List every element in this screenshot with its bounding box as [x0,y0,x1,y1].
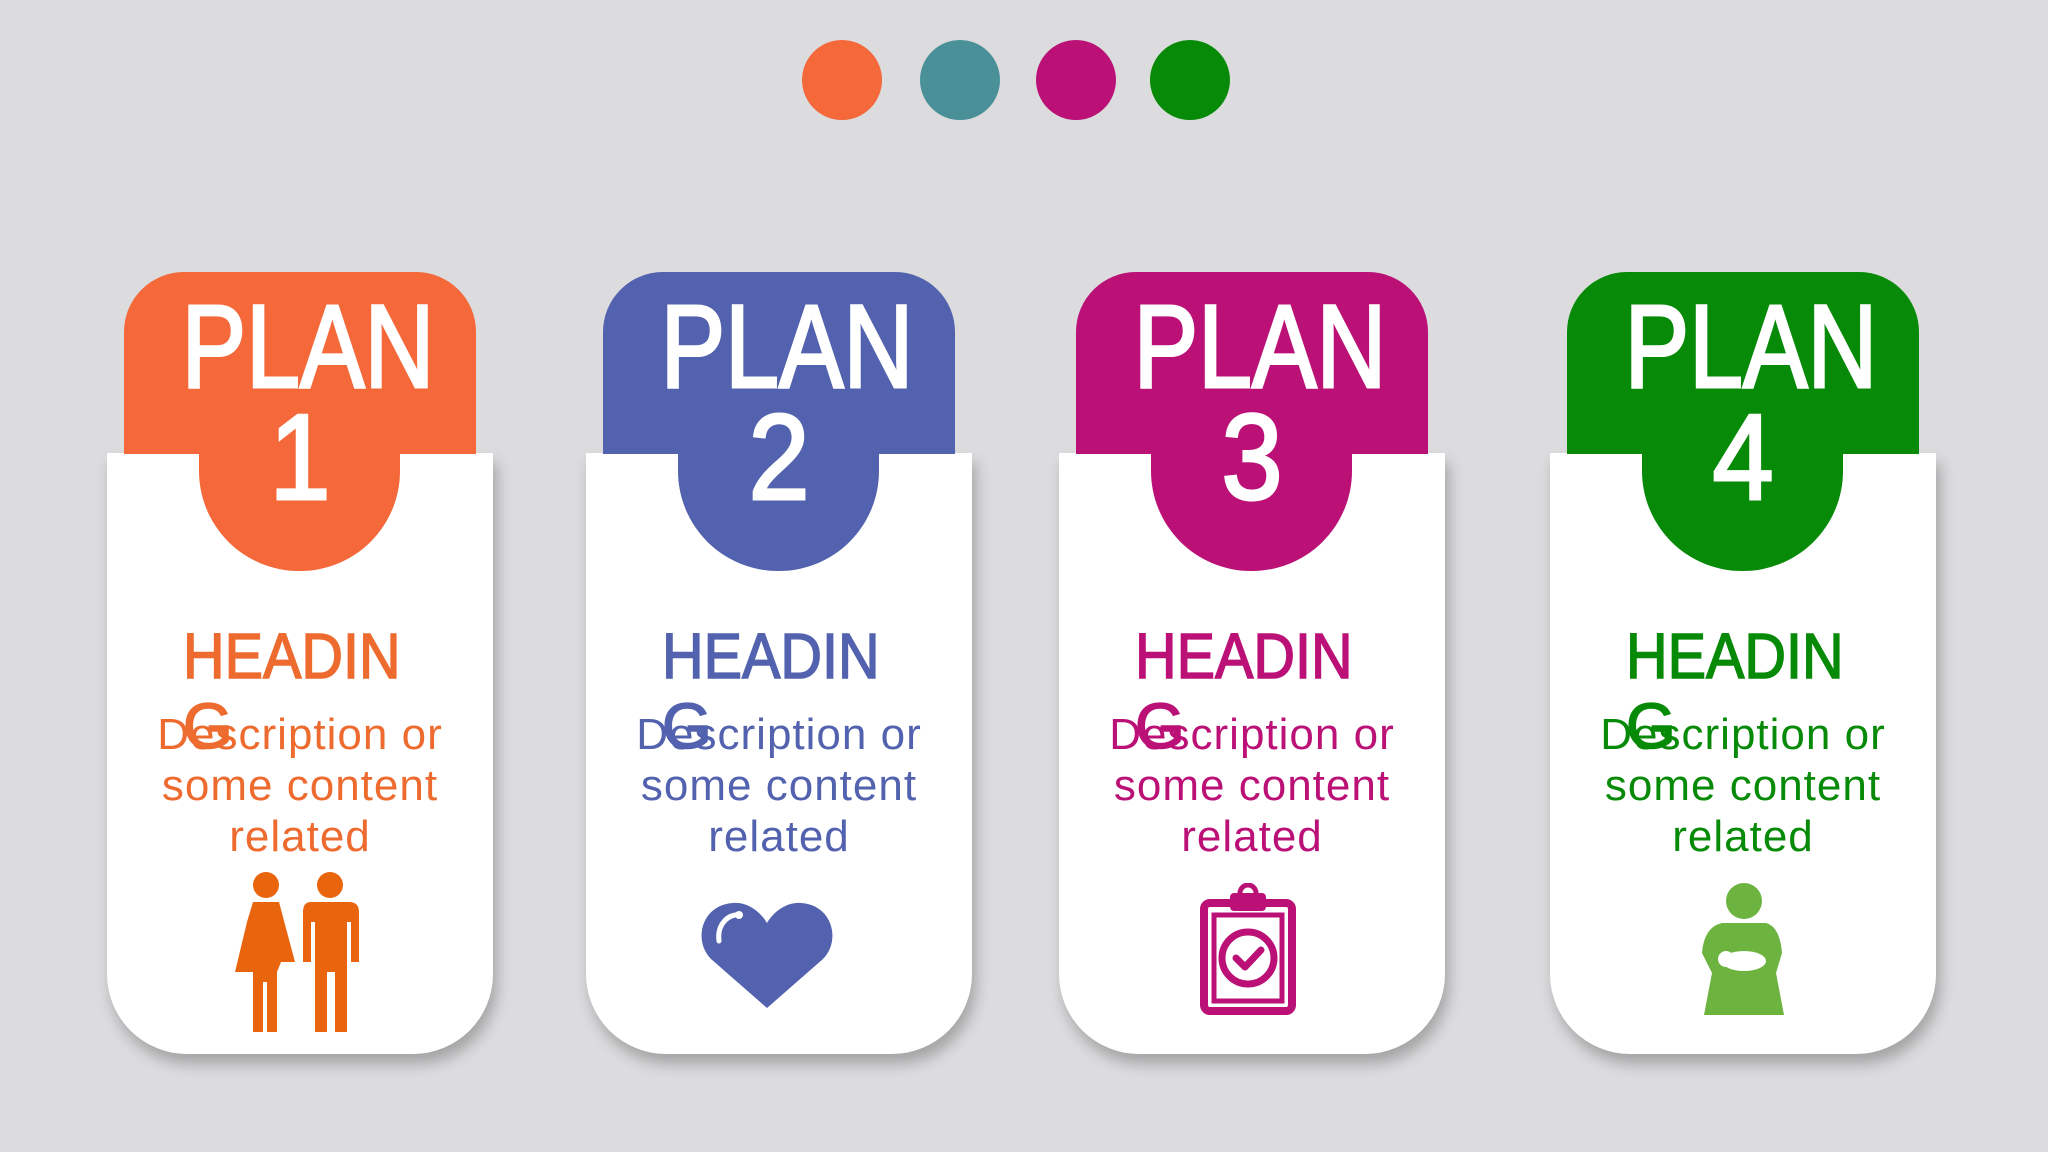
icon: heart [702,902,832,1008]
heading: HEADIN [1135,620,1353,692]
description: Description or [157,710,443,759]
dot: teal [920,40,1000,120]
icon: clipboard [1200,883,1296,1015]
panel: plan 1: G [183,690,233,762]
dot: magenta [1036,40,1116,120]
description: some content [1114,761,1390,810]
panel: plan 1 [104,272,504,1071]
description [636,710,922,861]
description: some content [1605,761,1881,810]
panel: plan 4: 4 [1712,389,1774,525]
description [1109,710,1395,861]
description: Description or [1600,710,1886,759]
description: related [1181,812,1323,861]
title: PLAN 3: PLAN [1134,281,1386,413]
description [1600,710,1886,861]
panel: plan 4 [1547,272,1947,1071]
panel: plan 3: 3 [1221,389,1283,525]
description: Description or [1109,710,1395,759]
dot: orange [802,40,882,120]
description: some content [162,761,438,810]
description: Description or [636,710,922,759]
panel: plan 2: 2 [748,389,810,525]
heading: HEADIN [1626,620,1844,692]
description: related [1672,812,1814,861]
title: PLAN 4: PLAN [1625,281,1877,413]
description: related [708,812,850,861]
panel: plan 1: 1 [269,389,331,525]
description: some content [641,761,917,810]
panel: plan 3 [1056,272,1456,1071]
panel: plan 2 [583,272,983,1071]
dot: green [1150,40,1230,120]
panel: plan 2: G [662,690,712,762]
description [157,710,443,861]
heading: HEADIN [183,620,401,692]
icon: mother and baby [1702,883,1784,1015]
panel: plan 4: G [1626,690,1676,762]
title: PLAN 2: PLAN [661,281,913,413]
icon: couple [235,872,359,1032]
panel: plan 3: G [1135,690,1185,762]
heading: HEADIN [662,620,880,692]
description: related [229,812,371,861]
title: PLAN 1: PLAN [182,281,434,413]
